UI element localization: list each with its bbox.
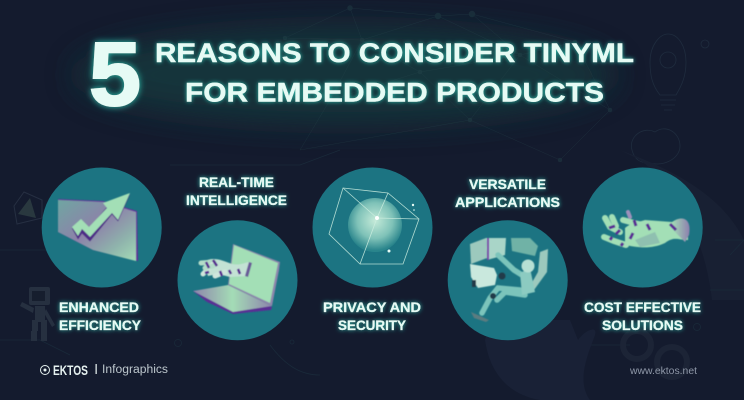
background: faint hand bottom centre bbox=[485, 320, 595, 400]
label: PRIVACY AND bbox=[323, 299, 421, 315]
label bbox=[59, 299, 142, 333]
label: INTELLIGENCE bbox=[186, 192, 287, 208]
background: circuit lines bbox=[0, 150, 744, 375]
panel: privacy and security bbox=[312, 168, 432, 333]
background icon: gears bbox=[623, 331, 687, 377]
background icon: light bulb and cloud bbox=[631, 34, 709, 164]
label: EFFICIENCY bbox=[59, 317, 142, 333]
label: VERSATILE bbox=[469, 176, 546, 192]
icon: laptop with robot hand bbox=[193, 244, 280, 314]
panel: cost effective solutions bbox=[583, 168, 703, 333]
icon: robot with floating screens bbox=[470, 238, 548, 322]
label: COST EFFECTIVE bbox=[584, 299, 701, 315]
title line 1: REASONS TO CONSIDER TINYML bbox=[155, 38, 634, 68]
circle 5 bbox=[583, 168, 703, 288]
background: faint hand top right bbox=[620, 150, 744, 300]
circle 3 bbox=[312, 168, 432, 288]
icon: robot hand bbox=[604, 212, 690, 247]
background glow behind title bbox=[75, 27, 615, 123]
logo caption: Infographics bbox=[102, 364, 168, 376]
divider bar bbox=[96, 364, 97, 374]
background icon: small robot bbox=[20, 287, 55, 341]
panel: real-time intelligence bbox=[178, 174, 298, 340]
circle 4 bbox=[448, 220, 568, 340]
label: REAL-TIME bbox=[199, 174, 274, 190]
logo: EKTOS Infographics bbox=[40, 362, 168, 378]
circle 2 bbox=[178, 220, 298, 340]
label bbox=[455, 176, 560, 210]
label: SOLUTIONS bbox=[602, 317, 683, 333]
website url: www.ektos.net bbox=[629, 365, 697, 377]
panel: enhanced efficiency bbox=[42, 168, 162, 333]
label bbox=[186, 174, 287, 208]
label: SECURITY bbox=[338, 317, 407, 333]
label: APPLICATIONS bbox=[455, 194, 560, 210]
label: ENHANCED bbox=[59, 299, 139, 315]
background network pattern bbox=[283, 6, 612, 162]
title line 2: FOR EMBEDDED PRODUCTS bbox=[185, 78, 604, 108]
circle 1 bbox=[42, 168, 162, 288]
icon: folder with rising arrow bbox=[58, 193, 138, 261]
icon: logo ring bbox=[40, 366, 50, 374]
logo wordmark: EKTOS bbox=[53, 362, 88, 378]
background icon: wireframe cube bbox=[14, 192, 42, 224]
label bbox=[323, 299, 421, 333]
icon: sphere in wireframe cube bbox=[329, 188, 419, 264]
big number 5: 5 bbox=[89, 25, 141, 125]
panel: versatile applications bbox=[448, 176, 568, 340]
label bbox=[584, 299, 701, 333]
title bbox=[89, 25, 634, 125]
